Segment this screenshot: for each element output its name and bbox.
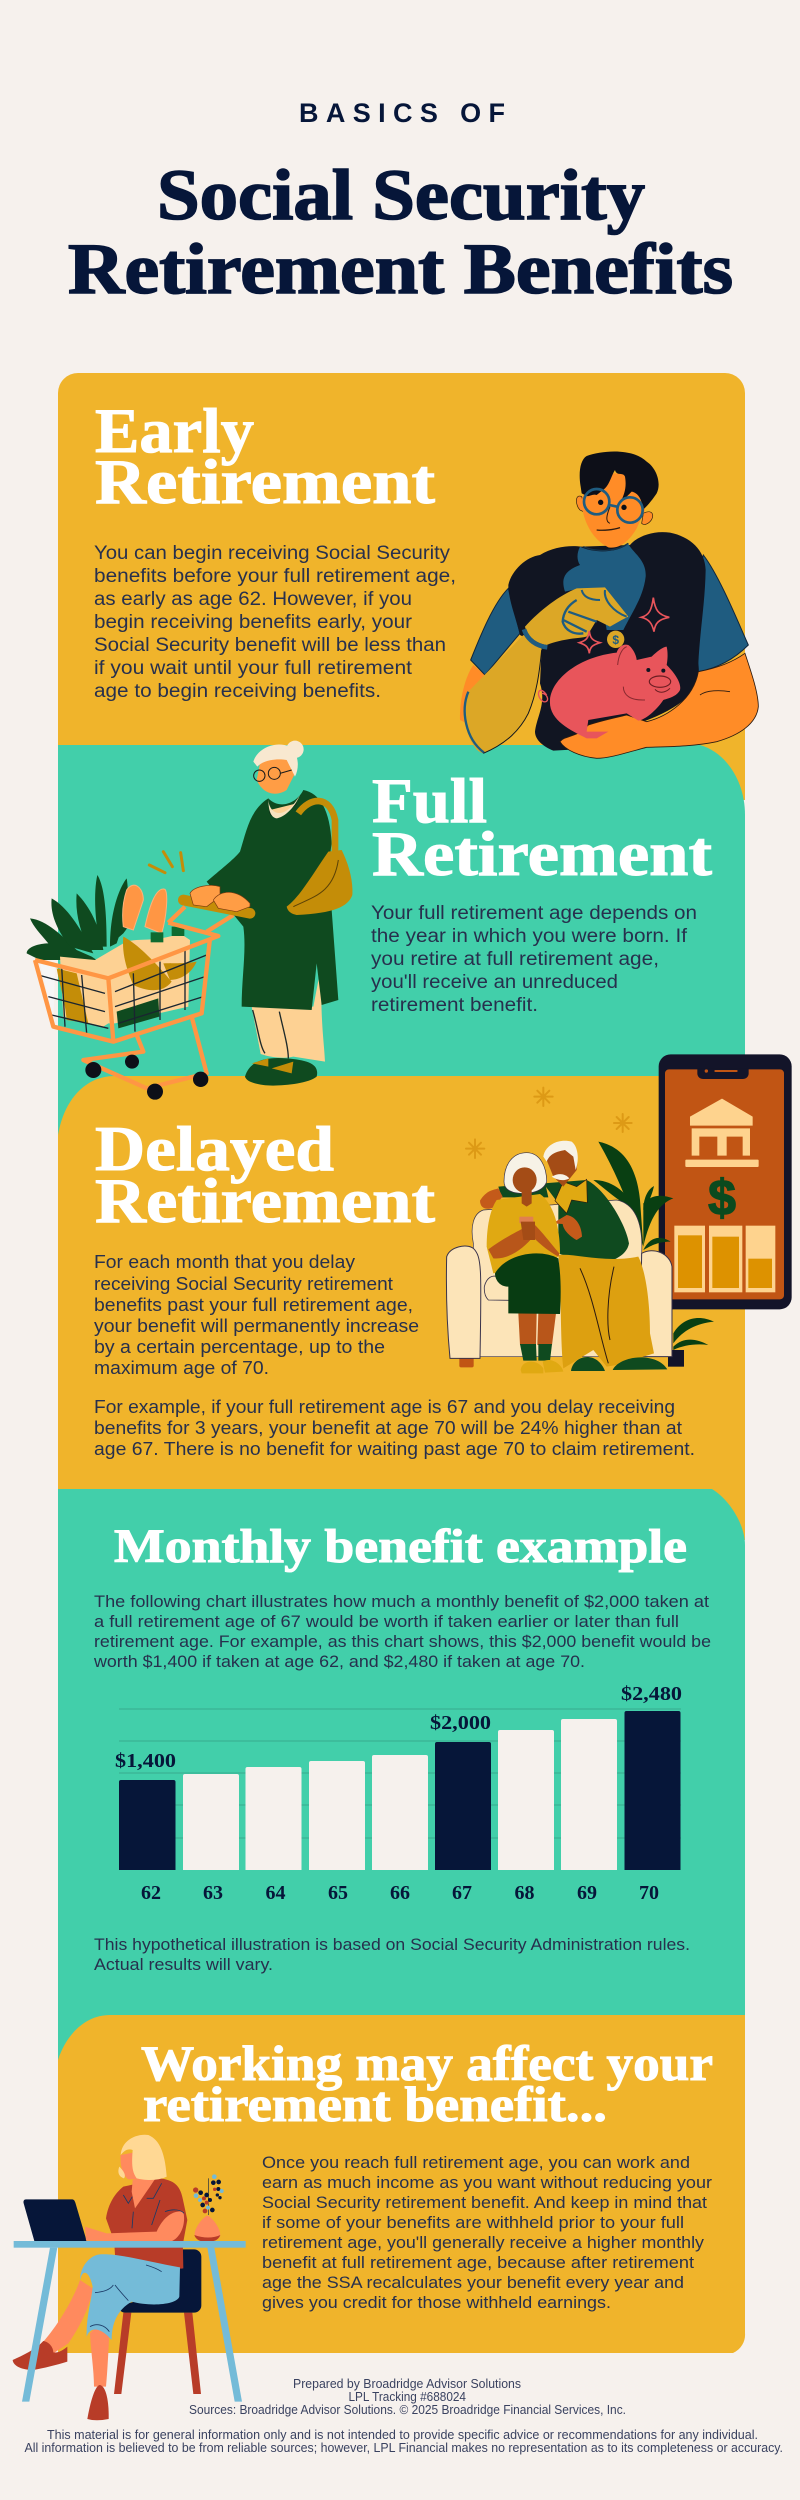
age axis labels: 63 (203, 1882, 223, 1904)
body text: working: earn as much income as you want without reducing your (262, 2173, 712, 2192)
phone (659, 1054, 792, 1309)
body text: early retirement: You can begin receiving Social Security (94, 543, 451, 564)
body text: early retirement: age to begin receiving benefits. (94, 681, 381, 702)
age axis labels: 62 (141, 1882, 161, 1904)
body text: working: Once you reach full retirement age, you can work and (262, 2153, 690, 2172)
body text: full retirement: retirement benefit. (371, 995, 538, 1016)
sparkles (466, 1088, 632, 1158)
body text: chart intro: a full retirement age of 67 would be worth if taken earlier or later than full (94, 1612, 679, 1631)
chart footnote: This hypothetical illustration is based on Social Security Administration rules. (94, 1935, 690, 1954)
panel: delayed retirement (58, 1076, 745, 1540)
chart footnote: Actual results will vary. (94, 1955, 273, 1974)
panel: full retirement (58, 745, 745, 1140)
body text: working: retirement age, you'll generally receive a higher monthly (262, 2233, 705, 2252)
body text: chart intro: retirement age. For example, as this chart shows, this $2,000 benefit would be (94, 1632, 711, 1651)
age axis labels: 66 (390, 1882, 410, 1904)
body text: chart intro: worth $1,400 if taken at age 62, and $2,480 if taken at age 70. (93, 1652, 585, 1671)
sofa (446, 1200, 672, 1367)
body text: full retirement: you'll receive an unreduced (371, 972, 618, 993)
age axis labels (141, 1882, 659, 1904)
heading: delayed retirement (95, 1113, 436, 1236)
man head (543, 1141, 578, 1187)
figure (13, 2135, 187, 2420)
plants (593, 1142, 714, 1350)
footer: preparer and sources: Sources: Broadridge Advisor Solutions. © 2025 Broadridge Financial Services, Inc. (189, 2402, 626, 2417)
age axis labels: 68 (514, 1882, 534, 1904)
body text: early retirement: as early as age 62. However, if you (94, 589, 412, 610)
body text: full retirement: the year in which you were born. If (371, 926, 688, 947)
heading: full retirement: Retirement (372, 818, 713, 889)
bank icon (685, 1099, 759, 1167)
body text: delayed retirement: maximum age of 70. (94, 1358, 269, 1378)
body text: full retirement: Your full retirement age depends on (371, 903, 697, 924)
body text: delayed retirement (94, 1252, 419, 1378)
heading: early retirement: Retirement (95, 446, 436, 517)
heading: monthly benefit example: Monthly benefit example (114, 1520, 687, 1573)
main title: Retirement Benefits (68, 229, 733, 309)
heading: working: Working may affect your (141, 2035, 713, 2091)
pants and shoes (245, 963, 325, 1086)
cart contents (27, 875, 197, 1028)
age axis labels: 69 (577, 1882, 597, 1904)
value labels: $2,000 (430, 1712, 491, 1734)
body text: full retirement (371, 903, 697, 1016)
footer: preparer and sources (189, 2376, 626, 2417)
body text: chart intro: The following chart illustrates how much a monthly benefit of $2,000 taken at (94, 1592, 709, 1611)
cart frame (35, 900, 250, 1088)
body text: delayed retirement example: For example, if your full retirement age is 67 and you delay receiving (94, 1397, 675, 1417)
illustration: woman working at laptop (13, 2135, 246, 2420)
illustration: older woman pushing shopping cart (27, 741, 352, 1100)
purse (287, 801, 352, 915)
panel: working may affect your retirement benefit (58, 2015, 745, 2353)
body text: early retirement: Social Security benefit will be less than (94, 635, 446, 656)
age axis labels: 67 (452, 1882, 472, 1904)
body text: full retirement: you retire at full retirement age, (371, 949, 659, 970)
body text: working: if some of your benefits are withheld prior to your full (262, 2213, 684, 2232)
mini bar chart (674, 1226, 775, 1292)
heading: full retirement (372, 765, 713, 889)
body text: early retirement: begin receiving benefits early, your (94, 612, 413, 633)
body text: early retirement: if you wait until your full retirement (94, 658, 413, 679)
body text: working: Social Security retirement benefit. And keep in mind that (262, 2193, 707, 2212)
cart wheels (85, 1055, 208, 1100)
bars (119, 1711, 680, 1870)
disclaimer: This material is for general information only and is not intended to provide specific advice or recommendations for any individual. (47, 2427, 758, 2442)
age axis labels: 64 (266, 1882, 286, 1904)
dollar sign: $ (708, 1170, 736, 1226)
kicker: basics of: BASICS OF (299, 98, 505, 128)
value labels: $2,480 (621, 1683, 682, 1705)
heading: working: retirement benefit... (143, 2076, 607, 2132)
body text: delayed retirement: benefits past your full retirement age, (94, 1295, 413, 1315)
plant in vase (193, 2174, 224, 2242)
panel: early retirement (58, 373, 745, 800)
heading: delayed retirement: Retirement (95, 1165, 436, 1236)
footer: preparer and sources: Prepared by Broadridge Advisor Solutions (293, 2376, 521, 2391)
head (253, 741, 304, 794)
coat (207, 790, 338, 1010)
heading: full retirement: Full (372, 765, 487, 836)
footer: preparer and sources: LPL Tracking #688024 (348, 2389, 466, 2404)
heading: delayed retirement: Delayed (95, 1113, 334, 1184)
body text: working: gives you credit for those withheld earnings. (262, 2293, 611, 2312)
man figure (480, 1179, 667, 1371)
age axis labels: 70 (639, 1882, 659, 1904)
chart footnote (94, 1935, 690, 1974)
body text: delayed retirement: your benefit will permanently increase (94, 1316, 419, 1336)
illustration: older couple on sofa with phone (446, 1054, 792, 1373)
desk (14, 2241, 246, 2402)
hands (190, 885, 250, 912)
age axis labels: 65 (328, 1882, 348, 1904)
body text: working (262, 2153, 712, 2312)
body text: delayed retirement example (94, 1397, 695, 1459)
main title: Social Security (157, 155, 645, 235)
disclaimer: All information is believed to be from reliable sources; however, LPL Financial makes no representation as to its completeness or accuracy. (24, 2440, 783, 2455)
body text: early retirement: benefits before your full retirement age, (94, 566, 456, 587)
laptop (23, 2199, 87, 2241)
main title (68, 155, 733, 309)
panel: monthly benefit example (58, 1489, 745, 2070)
heading: early retirement: Early (95, 395, 254, 466)
chair (114, 2249, 201, 2394)
value labels: $1,400 (115, 1750, 176, 1772)
value labels (115, 1683, 682, 1772)
body text: working: benefit at full retirement age, because after retirement (262, 2253, 694, 2272)
disclaimer (24, 2427, 783, 2455)
woman figure (487, 1194, 563, 1373)
illustration: man with piggy bank: $ (612, 633, 619, 647)
heading: early retirement (95, 395, 436, 517)
body text: working: age the SSA recalculates your benefit every year and (262, 2273, 684, 2292)
spark marks (149, 852, 183, 873)
body text: delayed retirement example: age 67. There is no benefit for waiting past age 70 to claim retirement. (94, 1439, 695, 1459)
body text: delayed retirement example: benefits for 3 years, your benefit at age 70 will be 24% higher than at (94, 1418, 682, 1438)
woman head (504, 1153, 547, 1207)
heading: working (141, 2035, 713, 2132)
body text: delayed retirement: by a certain percentage, up to the (94, 1337, 385, 1357)
body text: early retirement (94, 543, 456, 702)
illustration: man with piggy bank (460, 452, 758, 758)
body text: delayed retirement: receiving Social Security retirement (94, 1274, 393, 1294)
bar chart: monthly benefit by claiming age (115, 1683, 682, 1904)
header: kicker and main title (68, 98, 733, 309)
body text: delayed retirement: For each month that you delay (94, 1252, 355, 1272)
body text: chart intro (93, 1592, 711, 1671)
